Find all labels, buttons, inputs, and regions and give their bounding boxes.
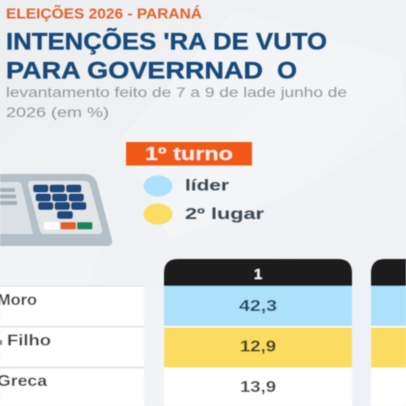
- column header 1: 1: [254, 266, 262, 283]
- row: Filho: Filho: [7, 332, 51, 350]
- keypad keys: [33, 184, 86, 219]
- column header 2: [371, 259, 406, 286]
- legend: líder: líder: [185, 178, 229, 194]
- row: Moro: [0, 286, 406, 326]
- row: Filho: 12,9: [240, 338, 276, 356]
- icon: voting machine: [0, 174, 112, 246]
- table: first-round results: [0, 259, 406, 406]
- title: PARA GOVERRNAD: [6, 58, 263, 84]
- kicker: election label: ELEIÇÕES 2026 - PARANÁ: [6, 4, 203, 22]
- legend: 2º lugar: 2º lugar: [185, 206, 264, 223]
- row: Moro: 42,3: [239, 298, 277, 315]
- legend: 2º lugar: [144, 204, 264, 224]
- subtitle: 2026 (em %): [6, 104, 109, 120]
- vote buttons: [44, 222, 59, 230]
- subtitle: [6, 84, 347, 120]
- badge: 1º turno: [126, 142, 252, 166]
- row: Greca: 13,9: [240, 379, 276, 396]
- title: INTENÇÕES 'RA DE VUTO: [6, 28, 327, 56]
- legend: líder: [144, 176, 229, 196]
- column header 1: [164, 259, 352, 286]
- title: O: [277, 58, 297, 84]
- badge: 1º turno: 1º turno: [145, 144, 233, 164]
- row: Filho: [0, 328, 406, 368]
- title: [6, 28, 327, 84]
- row: Greca: [0, 373, 276, 396]
- subtitle: levantamento feito de 7 a 9 de lade junho de: [6, 84, 347, 100]
